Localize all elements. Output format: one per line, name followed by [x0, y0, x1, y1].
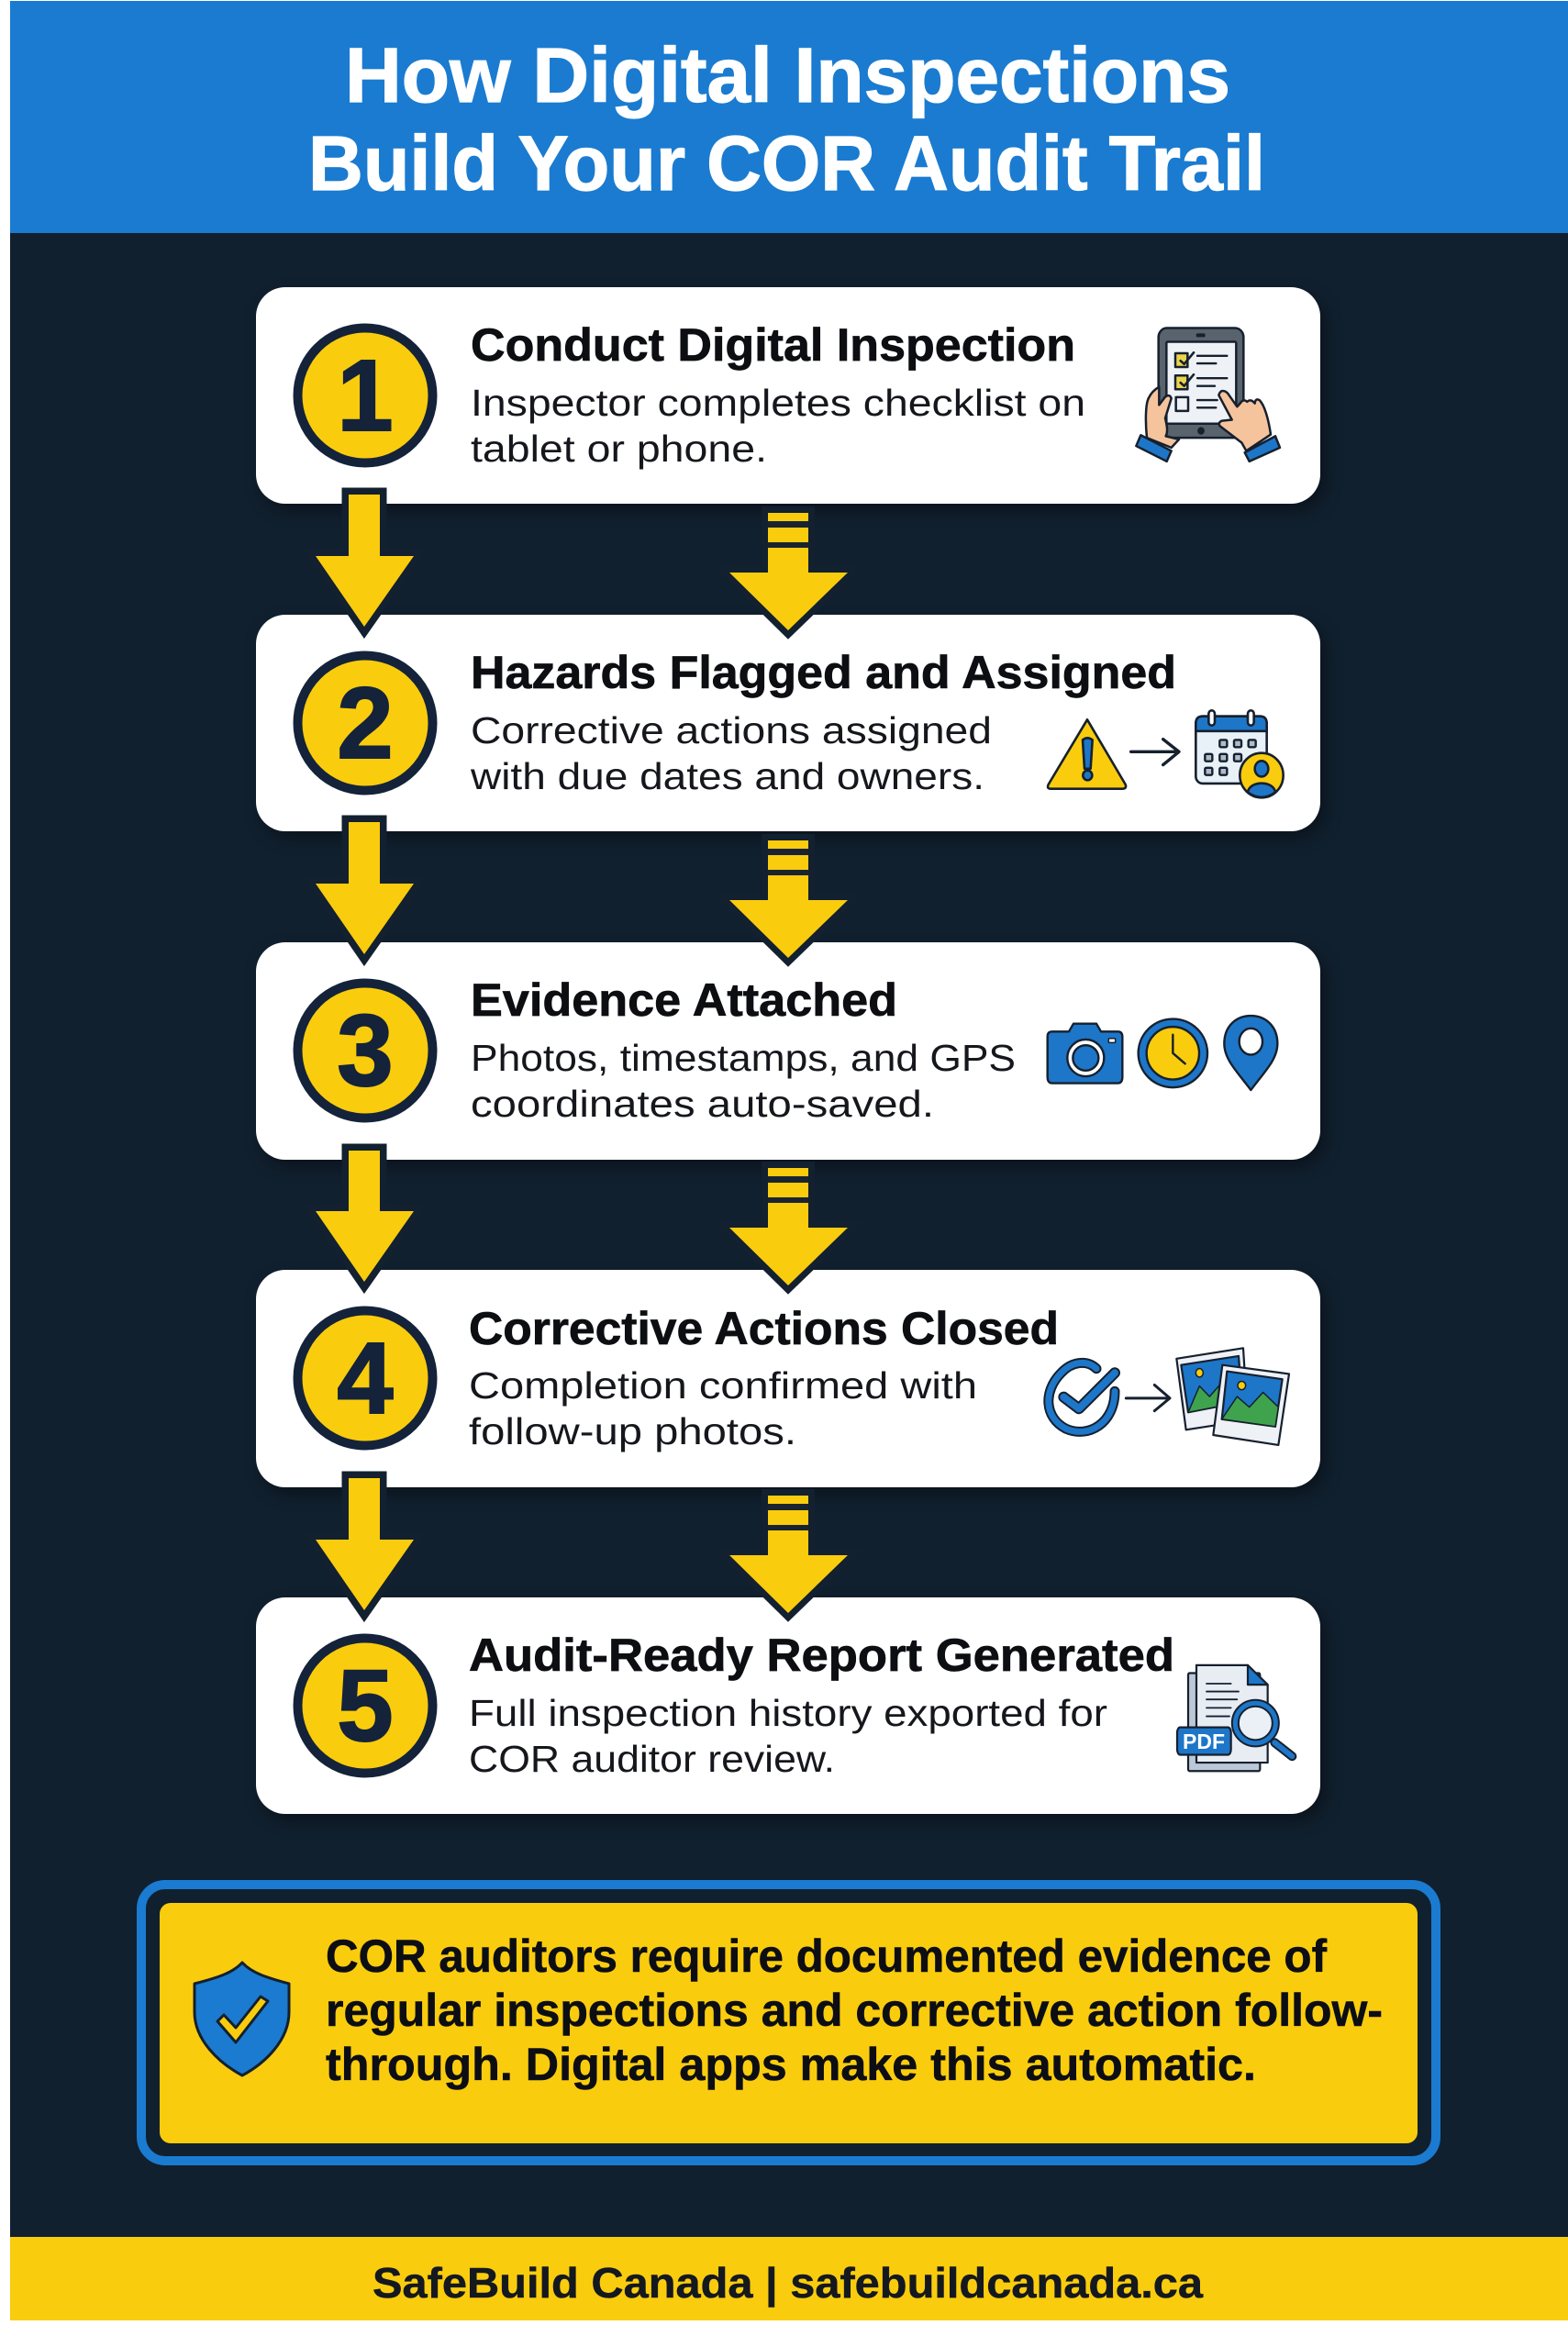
step 3 description	[471, 1037, 1016, 1125]
step 2 heading: Hazards Flagged and Assigned	[471, 647, 1176, 698]
footer	[10, 2237, 1568, 2320]
number badge 1: 1	[337, 339, 394, 452]
panel: step 4	[256, 1270, 1320, 1487]
arrow: step 3 to 4 centre	[729, 1168, 848, 1285]
step 5 description	[469, 1692, 1107, 1780]
title banner	[10, 1, 1568, 233]
panel: step 2	[256, 615, 1320, 831]
callout	[141, 1885, 1436, 2161]
step 5 description: Full inspection history exported for	[469, 1692, 1107, 1734]
callout text: regular inspections and corrective action follow-	[326, 1985, 1383, 2036]
step 5 description: COR auditor review.	[469, 1738, 835, 1780]
step 2 description: Corrective actions assigned	[471, 709, 992, 751]
step 1 description: tablet or phone.	[471, 428, 767, 470]
title banner: How Digital Inspections	[345, 32, 1230, 118]
arrow: step 1 to 2 left	[316, 495, 414, 627]
callout text	[326, 1930, 1383, 2090]
number badge 2	[297, 655, 433, 791]
step 1 heading: Conduct Digital Inspection	[471, 319, 1075, 371]
step 4 description: Completion confirmed with	[469, 1364, 977, 1407]
arrow: step 4 to 5 left	[316, 1478, 414, 1610]
panel: step 3	[256, 942, 1320, 1160]
step 3 description: Photos, timestamps, and GPS	[471, 1037, 1016, 1079]
icon: check circle to follow-up photos	[1049, 1348, 1289, 1445]
number badge 4: 4	[337, 1322, 394, 1435]
step 4 description: follow-up photos.	[469, 1410, 796, 1452]
number badge 3: 3	[337, 995, 394, 1107]
icon: tablet with checklist and hands	[1136, 328, 1280, 462]
step 3 description: coordinates auto-saved.	[471, 1083, 934, 1125]
arrow: step 2 to 3 centre	[729, 840, 848, 958]
callout text: COR auditors require documented evidence of	[326, 1930, 1327, 1982]
number badge 1	[297, 328, 433, 462]
footer: SafeBuild Canada | safebuildcanada.ca	[373, 2259, 1203, 2307]
number badge 4	[297, 1310, 433, 1446]
step 5 heading: Audit-Ready Report Generated	[469, 1630, 1174, 1681]
icon: PDF report with magnifying glass	[1177, 1665, 1292, 1771]
icon: shield with check	[195, 1963, 289, 2075]
step 2 description: with due dates and owners.	[470, 755, 984, 797]
PDF badge label: PDF	[1183, 1730, 1225, 1753]
number badge 5: 5	[337, 1650, 394, 1763]
number badge 2: 2	[337, 667, 394, 780]
step 1 description	[471, 382, 1085, 470]
arrow: step 3 to 4 left	[316, 1151, 414, 1282]
step 4 heading: Corrective Actions Closed	[469, 1303, 1059, 1354]
panel: step 5	[256, 1597, 1320, 1814]
arrow: step 4 to 5 centre	[729, 1496, 848, 1613]
number badge 5	[297, 1639, 433, 1773]
title banner: Build Your COR Audit Trail	[308, 120, 1265, 206]
step 3 heading: Evidence Attached	[471, 974, 897, 1026]
number badge 3	[297, 984, 433, 1118]
panel: step 1	[256, 287, 1320, 504]
step 4 description	[469, 1364, 977, 1452]
step 1 description: Inspector completes checklist on	[471, 382, 1085, 424]
arrow: step 2 to 3 left	[316, 822, 414, 954]
icon: warning triangle to calendar with assignee	[1048, 710, 1284, 797]
callout text: through. Digital apps make this automatic.	[326, 2039, 1256, 2090]
step 2 description	[470, 709, 992, 797]
arrow: step 1 to 2 centre	[729, 513, 848, 630]
icon: camera, clock and location pin	[1048, 1016, 1277, 1090]
